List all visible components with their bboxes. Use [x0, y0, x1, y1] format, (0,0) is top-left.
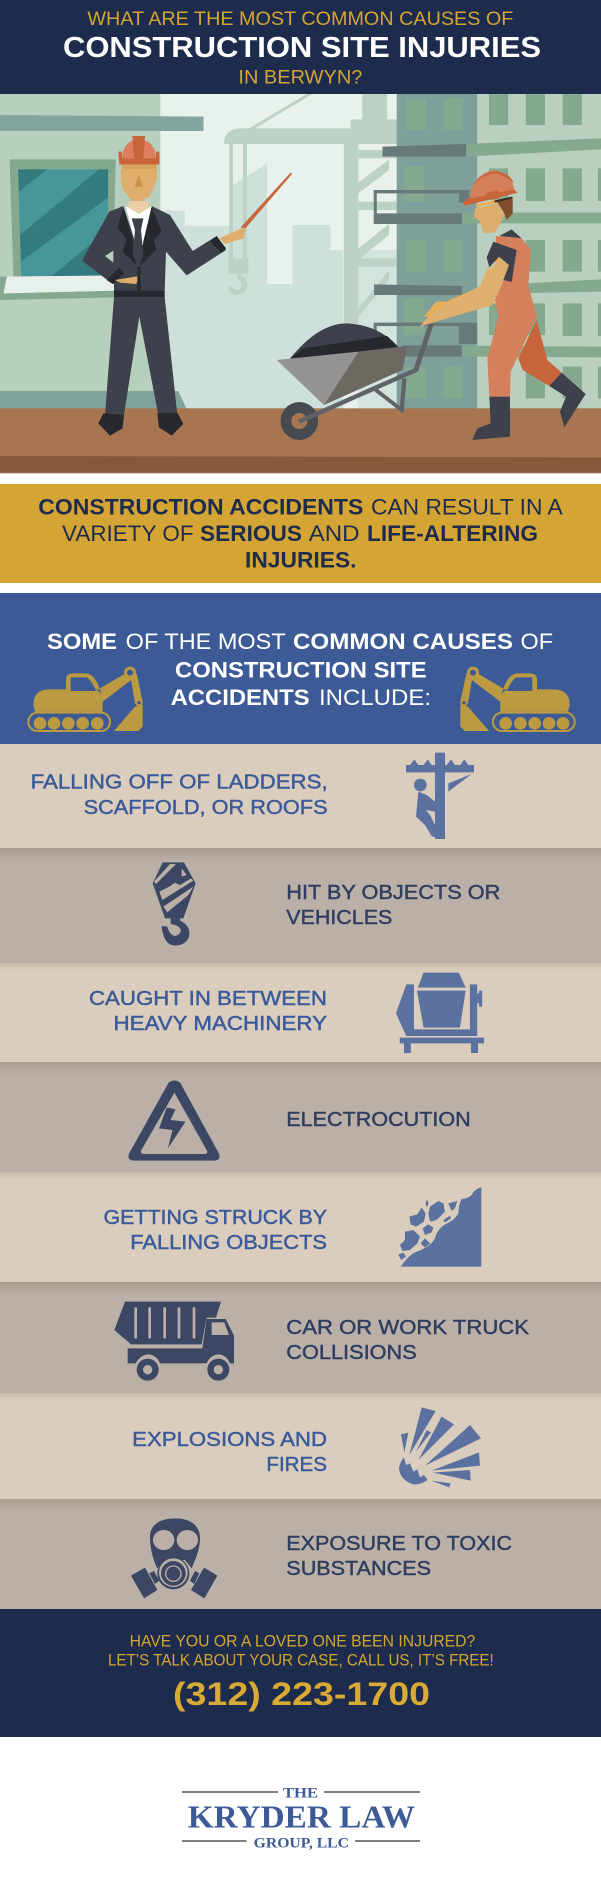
toxic text: SUBSTANCES: [286, 1557, 431, 1580]
icon: rockslide: [398, 1187, 481, 1267]
list row: falling objects: [0, 1172, 601, 1282]
statement line 3: INJURIES.: [245, 548, 356, 573]
icon: excavator left: [28, 667, 143, 731]
hit by objects text: [286, 881, 500, 929]
falling text: SCAFFOLD, OR ROOFS: [84, 796, 328, 819]
gold statement panel: [0, 484, 601, 583]
statement line 2: LIFE-ALTERING: [367, 521, 538, 546]
icon: gas mask: [131, 1518, 217, 1598]
heading line 2: CONSTRUCTION SITE: [175, 657, 427, 682]
phone number: (312) 223-1700: [173, 1676, 430, 1712]
list row: falling: [0, 744, 601, 848]
statement line 1: [38, 495, 563, 520]
list row: electrocution: [0, 1062, 601, 1172]
toxic text: EXPOSURE TO TOXIC: [286, 1532, 512, 1555]
header line 1: WHAT ARE THE MOST COMMON CAUSES OF: [87, 9, 513, 30]
caught text: CAUGHT IN BETWEEN: [89, 987, 327, 1010]
truck text: COLLISIONS: [286, 1341, 417, 1364]
icon: excavator right: [460, 667, 575, 731]
ground: [0, 408, 601, 473]
falling text: [31, 770, 328, 819]
heading line 1: [47, 629, 553, 654]
statement line 1: CONSTRUCTION ACCIDENTS: [38, 495, 363, 520]
hit by objects text: VEHICLES: [286, 906, 392, 929]
list row: caught in machinery: [0, 963, 601, 1062]
background buildings and crane: [0, 94, 601, 409]
heading line 1: SOME: [47, 629, 117, 654]
crane: [224, 94, 399, 324]
statement line 2: VARIETY OF: [62, 521, 194, 546]
truck text: [286, 1316, 529, 1364]
illustration: construction site with lawyer and worker: [0, 94, 601, 473]
heading line 3: ACCIDENTS: [171, 685, 310, 710]
footer call to action: [0, 1609, 601, 1737]
left building: [0, 94, 204, 409]
caught text: HEAVY MACHINERY: [114, 1012, 327, 1035]
blue heading panel: [0, 593, 601, 744]
header line 3: IN BERWYN?: [238, 67, 362, 88]
lawyer figure: [82, 136, 292, 436]
heading line 1: OF THE MOST: [126, 629, 286, 654]
worker figure: [420, 170, 586, 440]
heading line 3: INCLUDE:: [319, 685, 431, 710]
falling objects text: [104, 1206, 327, 1254]
caught text: [89, 987, 327, 1035]
toxic text: [286, 1532, 512, 1580]
hit by objects text: HIT BY OBJECTS OR: [286, 881, 500, 904]
heading line 3: [171, 685, 431, 710]
statement line 1: CAN RESULT IN A: [371, 495, 563, 520]
falling objects text: GETTING STRUCK BY: [104, 1206, 327, 1229]
logo: The Kryder Law Group, LLC: KRYDER LAW: [188, 1798, 415, 1834]
explosions text: [132, 1428, 327, 1476]
list row: explosions: [0, 1393, 601, 1499]
logo: The Kryder Law Group, LLC: [182, 1786, 420, 1851]
footer prompt: [108, 1633, 494, 1670]
icon: crane hook: [153, 862, 196, 946]
explosions text: FIRES: [266, 1453, 327, 1476]
tower with windows: [374, 94, 601, 409]
statement line 2: SERIOUS: [200, 521, 302, 546]
statement line 2: [62, 521, 538, 546]
electrocution text: ELECTROCUTION: [286, 1108, 471, 1131]
wheelbarrow: [277, 323, 431, 440]
icon: explosion: [399, 1407, 481, 1487]
heading line 1: COMMON CAUSES: [293, 629, 513, 654]
heading line 1: OF: [520, 629, 553, 654]
icon: electric warning triangle: [128, 1080, 220, 1161]
header banner: [0, 0, 601, 94]
list row: hit by objects: [0, 848, 601, 963]
icon: worker climbing pole: [406, 753, 474, 839]
explosions text: EXPLOSIONS AND: [132, 1428, 327, 1451]
footer prompt: HAVE YOU OR A LOVED ONE BEEN INJURED?: [130, 1633, 475, 1651]
truck text: CAR OR WORK TRUCK: [286, 1316, 529, 1339]
list row: toxic substances: [0, 1499, 601, 1609]
list row: truck collisions: [0, 1282, 601, 1393]
statement line 2: AND: [309, 521, 360, 546]
icon: dump truck: [114, 1302, 234, 1381]
header title: CONSTRUCTION SITE INJURIES: [63, 32, 541, 64]
footer prompt: LET’S TALK ABOUT YOUR CASE, CALL US, IT’S FREE!: [108, 1652, 494, 1670]
falling objects text: FALLING OBJECTS: [130, 1231, 327, 1254]
logo: The Kryder Law Group, LLC: THE: [283, 1786, 318, 1802]
icon: cement mixer: [396, 973, 484, 1053]
falling text: FALLING OFF OF LADDERS,: [31, 770, 328, 793]
logo: The Kryder Law Group, LLC: GROUP, LLC: [254, 1835, 349, 1851]
scaffolding: [374, 144, 477, 357]
